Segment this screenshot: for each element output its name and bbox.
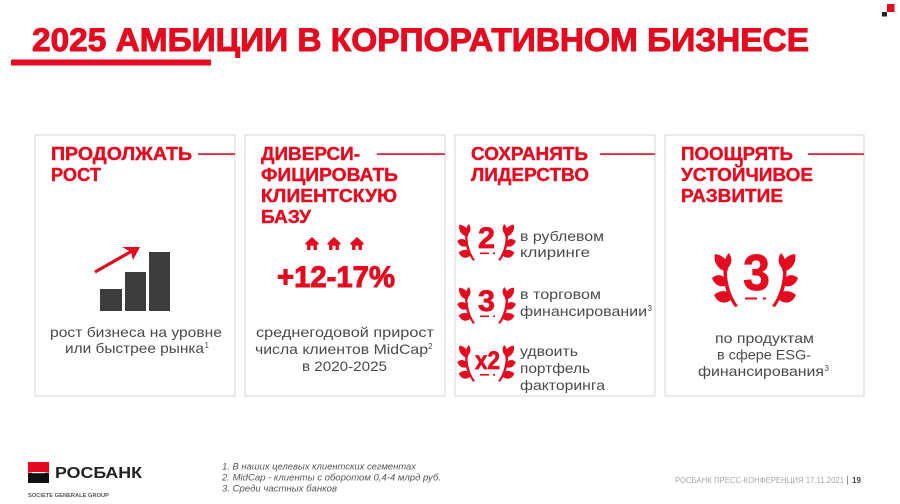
icon: growing bar chart with arrow [95,247,170,311]
icon: laurel rank 2 [457,222,516,261]
text: trade finance [520,286,652,319]
text: business growth [50,324,222,356]
heading: continue growth: РОСТ [51,165,101,185]
heading: continue growth: ПРОДОЛЖАТЬ [51,144,192,164]
heading: diversify: ДИВЕРСИ- [261,144,360,164]
text: ruble clearing: клиринге [520,244,590,260]
heading: diversify [261,144,445,227]
heading: diversify: ФИЦИРОВАТЬ [261,165,398,185]
heading: leadership: СОХРАНЯТЬ [471,144,588,164]
text: ESG financing [698,330,830,379]
heading: sustainable development: ПООЩРЯТЬ [681,144,793,164]
panel: diversify clients [245,135,445,396]
text: trade finance: финансировании [520,303,647,319]
text: client growth description: среднегодовой прирост [256,324,435,340]
icon: laurel rank 2: 2 [478,222,495,255]
text: double factoring [520,343,605,393]
icon: three houses [306,237,364,250]
text: trade finance: в торговом [520,286,601,302]
heading: sustainable development: УСТОЙЧИВОЕ [681,164,813,185]
text: client growth description: числа клиентов MidCap [255,341,428,357]
icon: laurel rank 3: 3 [478,285,495,318]
text: double factoring: удвоить [520,343,578,359]
heading: continue growth [51,144,235,185]
heading: sustainable development [681,144,864,206]
footnotes: 3. Среди частных банков [222,484,337,494]
icon: corner mark [882,4,894,16]
panel: continue growth [35,135,235,396]
footnotes: 2. MidCap - клиенты с оборотом 0,4-4 млрд руб. [221,472,441,482]
text: business growth: 1 [204,341,210,350]
text: ruble clearing: в рублевом [520,228,604,244]
logo: Rosbank: РОСБАНК [55,465,143,482]
heading: leadership [471,144,655,185]
footer: press conference and page number: РОСБАНК ПРЕСС-КОНФЕРЕНЦИЯ 17.11.2021 [675,476,845,485]
text: double factoring: портфель [520,360,590,376]
text: ESG financing: финансирования [698,363,824,379]
icon: laurel x2: x2 [475,347,500,375]
heading: diversify: БАЗУ [261,207,312,227]
text: ESG financing: 3 [824,364,830,373]
text: ruble clearing [520,228,604,260]
icon: laurel rank 3 [457,285,516,324]
footer: press conference and page number: 19 [852,476,862,485]
text: business growth: рост бизнеса на уровне [50,324,222,340]
text: client growth description: 2 [428,342,433,351]
logo: Rosbank [28,462,143,499]
text: double factoring: факторинга [520,377,605,393]
heading: sustainable development: РАЗВИТИЕ [681,186,783,206]
text: client growth description [255,324,435,374]
footnotes [221,462,441,494]
icon: large laurel rank 3: 3 [743,244,770,301]
icon: large laurel rank 3 [712,244,798,307]
footnotes: 1. В наших целевых клиентских сегментах [222,462,417,472]
panel: keep leadership [455,135,655,396]
title underline bar [11,60,211,66]
text: ESG financing: по продуктам [715,330,814,346]
figure: client growth: +12-17% [277,261,395,294]
text: trade finance: 3 [648,304,652,313]
logo: Rosbank: SOCIETE GENERALE GROUP [28,493,109,499]
heading: diversify: КЛИЕНТСКУЮ [261,186,397,206]
heading: leadership: ЛИДЕРСТВО [471,165,589,185]
icon: laurel x2 [457,345,516,382]
title: 2025 АМБИЦИИ В КОРПОРАТИВНОМ БИЗНЕСЕ [32,22,809,58]
text: business growth: или быстрее рынка [65,340,204,356]
panel: sustainable development [665,135,864,396]
text: ESG financing: в сфере ESG- [717,346,811,362]
text: client growth description: в 2020-2025 [302,358,387,374]
